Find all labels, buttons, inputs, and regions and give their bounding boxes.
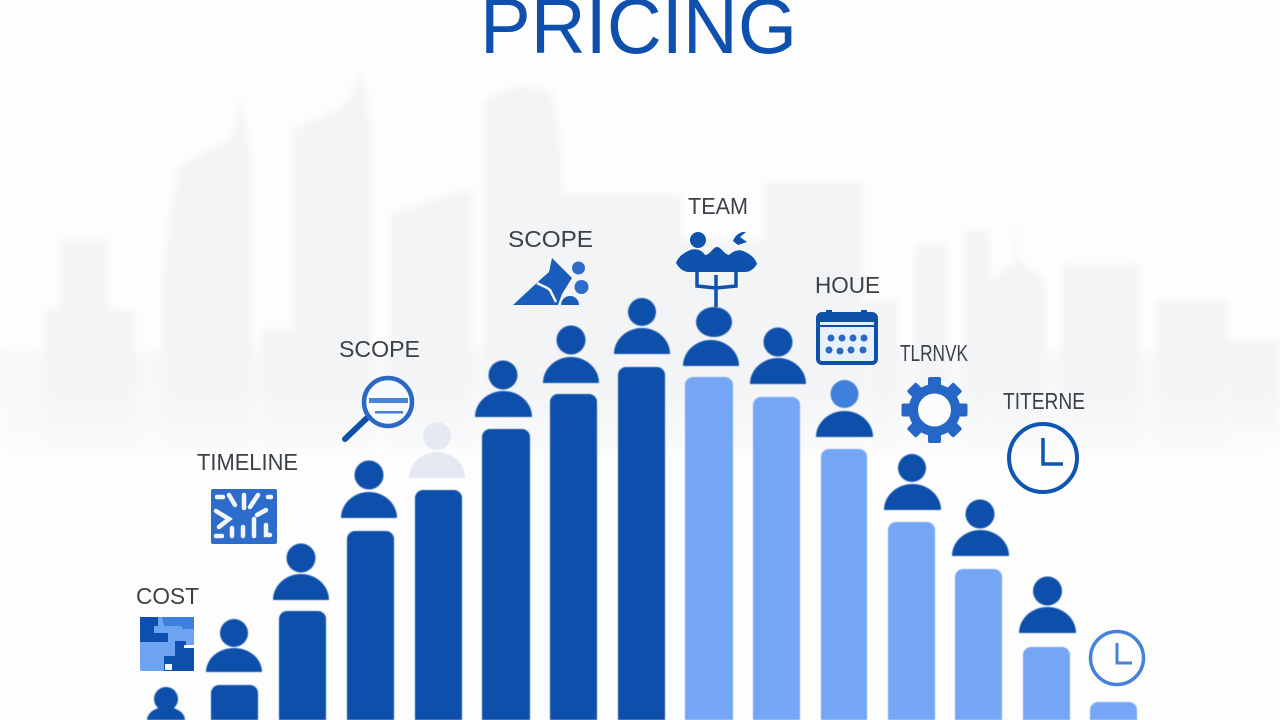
bar 13 [955, 569, 1002, 720]
bar 6 [482, 429, 530, 720]
person 1 [147, 687, 185, 720]
bar 11 [821, 449, 867, 720]
person 6 [475, 360, 532, 417]
label: scope right: SCOPE [508, 226, 593, 252]
bar 8 [618, 367, 665, 720]
label: team: TEAM [688, 193, 748, 219]
person icons row [147, 298, 1076, 720]
person 10 [750, 328, 806, 384]
icon: puzzle [140, 617, 194, 671]
bar 7 [550, 394, 597, 720]
bar chart [211, 367, 1137, 720]
label: houe: HOUE [815, 272, 880, 298]
person 9 [683, 307, 739, 366]
bar 12 [888, 522, 935, 720]
label: trnk: TLRNVK [900, 340, 968, 366]
person 8 [614, 298, 670, 354]
icon: clock small [1090, 632, 1144, 684]
bar 15 [1090, 702, 1137, 720]
bar 3 [279, 611, 326, 720]
person 12 [884, 454, 941, 510]
bar 9 [685, 377, 733, 720]
background city skyline [0, 70, 1280, 450]
icon: calendar [818, 310, 876, 363]
label: scope left: SCOPE [339, 336, 420, 362]
icon: team [676, 232, 757, 307]
bar 2 [211, 685, 258, 720]
icon: gear [902, 377, 968, 443]
icon: circuit square [211, 489, 277, 544]
bar 10 [753, 397, 800, 720]
label: cost: COST [136, 583, 199, 609]
bar 4 [347, 531, 394, 720]
label: timeline right: TITERNE [1003, 388, 1085, 414]
person 3 [273, 544, 329, 600]
bar 14 [1023, 647, 1070, 720]
icon: clock large [1009, 424, 1077, 492]
icon: magnifier [345, 378, 412, 439]
label: timeline: TIMELINE [197, 449, 298, 475]
person 13 [952, 500, 1009, 556]
bar 5 [415, 490, 462, 720]
person 14 [1019, 576, 1076, 633]
person 11 [816, 380, 873, 437]
person 2 [206, 619, 262, 672]
person 5 faded [409, 422, 465, 478]
person 7 [543, 326, 599, 383]
person 4 [341, 460, 397, 518]
icon: scope shapes [513, 258, 588, 305]
